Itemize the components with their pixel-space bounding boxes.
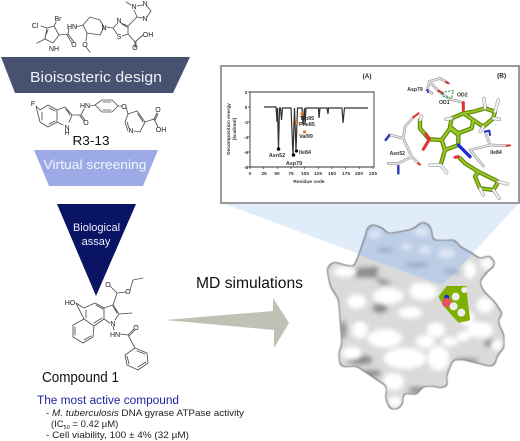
R3-13 structure: O bbox=[121, 104, 127, 111]
R3-13 structure: O bbox=[155, 107, 161, 114]
funnel step: virtual screening bbox=[34, 150, 158, 186]
starting inhibitor structure: OH bbox=[143, 32, 153, 39]
starting inhibitor structure: HN bbox=[67, 24, 77, 31]
activity summary text: The most active compound bbox=[37, 395, 179, 407]
starting inhibitor structure: Cl bbox=[32, 23, 39, 30]
blue upper lobe bbox=[359, 223, 472, 285]
binding pose B: ligand and residues bbox=[386, 73, 510, 198]
starting inhibitor structure: O bbox=[71, 42, 77, 49]
funnel step: biological assay: Biological bbox=[73, 222, 120, 234]
chart A: decomposition energy: 125 bbox=[314, 171, 322, 177]
chart A: decomposition energy: (A) bbox=[362, 73, 372, 80]
R3-13 structure: F bbox=[31, 101, 35, 108]
funnel step: bioisosteric design: Bioisosteric design bbox=[30, 70, 162, 86]
R3-13 structure: HN bbox=[80, 103, 90, 110]
binding pose B: ligand and residues: Asn52 bbox=[390, 151, 405, 157]
chart A: decomposition energy: Ile84 bbox=[299, 150, 311, 156]
starting inhibitor structure: O bbox=[82, 42, 88, 49]
starting inhibitor structure bbox=[32, 1, 153, 53]
starting inhibitor structure: S bbox=[117, 34, 122, 41]
starting inhibitor structure: Br bbox=[54, 16, 62, 23]
label: MD simulations: MD simulations bbox=[196, 275, 303, 292]
funnel step: virtual screening: Virtual screening bbox=[44, 157, 146, 172]
chart A: decomposition energy: 225 bbox=[369, 171, 377, 177]
bound ligand spheres bbox=[440, 287, 469, 321]
funnel step: biological assay bbox=[57, 204, 136, 296]
funnel step: biological assay: assay bbox=[82, 236, 111, 248]
chart A: decomposition energy: Residue code bbox=[293, 179, 325, 185]
starting inhibitor structure: O bbox=[132, 45, 138, 52]
arrow to protein bbox=[165, 298, 289, 348]
chart A: decomposition energy: Asp79 bbox=[286, 161, 302, 167]
label: compound 1: Compound 1 bbox=[42, 370, 119, 386]
label: R3-13: R3-13 bbox=[72, 134, 110, 148]
binding pose B: ligand and residues: Ile84 bbox=[490, 150, 502, 156]
starting inhibitor structure: N bbox=[116, 18, 122, 25]
starting inhibitor structure: N bbox=[101, 25, 107, 32]
R3-13 structure: O bbox=[83, 120, 89, 127]
chart A: decomposition energy: 50 bbox=[274, 171, 280, 177]
chart A: decomposition energy: 100 bbox=[301, 171, 309, 177]
chart A: decomposition energy: -2 bbox=[244, 120, 248, 126]
chart A: decomposition energy: 150 bbox=[328, 171, 336, 177]
projection wedge from protein to detail panel bbox=[222, 203, 519, 285]
chart A: decomposition energy: 0 bbox=[245, 105, 248, 111]
binding pose B: ligand and residues: OD2 bbox=[457, 93, 468, 99]
chart A: decomposition energy: 0 bbox=[249, 171, 252, 177]
chart A: decomposition energy: Val99 bbox=[299, 134, 313, 140]
R3-13 structure: H bbox=[64, 130, 70, 137]
chart A: decomposition energy: Asn52 bbox=[269, 153, 285, 159]
chart A: decomposition energy: -4 bbox=[244, 135, 248, 141]
protein surface with bound ligand bbox=[326, 222, 506, 410]
activity summary text: = 0.42 µM) bbox=[70, 419, 118, 430]
chart A: decomposition energy: 2 bbox=[245, 90, 248, 96]
chart A: decomposition energy: 75 bbox=[288, 171, 294, 177]
chart A: decomposition energy: -8 bbox=[244, 165, 248, 171]
R3-13 structure: N bbox=[64, 125, 70, 132]
detail panel bbox=[221, 66, 519, 203]
compound 1 structure: HO bbox=[65, 300, 76, 307]
activity summary text: - M. tuberculosis DNA gyrase ATPase activity bbox=[46, 408, 244, 419]
starting inhibitor structure: NH bbox=[49, 46, 59, 53]
chart A: decomposition energy: 200 bbox=[355, 171, 363, 177]
activity summary text: 50 bbox=[64, 425, 70, 431]
chart A: decomposition energy: Phe85 bbox=[299, 122, 315, 128]
compound 1 structure bbox=[65, 278, 148, 370]
chart A: decomposition energy bbox=[226, 73, 377, 185]
compound 1 structure: O bbox=[133, 325, 139, 332]
activity summary text: (IC bbox=[51, 419, 64, 430]
chart A: decomposition energy: Trp95 bbox=[300, 116, 314, 122]
compound 1 structure: O bbox=[105, 282, 111, 289]
compound 1 structure: N bbox=[110, 321, 116, 328]
chart A: decomposition energy: (kcal/mol) bbox=[232, 117, 238, 140]
activity summary text: - Cell viability, 100 ± 4% (32 µM) bbox=[46, 430, 189, 441]
binding pose B: ligand and residues: OD1 bbox=[439, 100, 450, 106]
chart A: decomposition energy: 175 bbox=[342, 171, 350, 177]
compound 1 structure: HN bbox=[110, 332, 120, 339]
compound 1 structure: O bbox=[125, 289, 131, 296]
binding pose B: ligand and residues: (B) bbox=[497, 73, 506, 80]
chart A: decomposition energy: Decomposition energy bbox=[226, 103, 232, 155]
chart A: decomposition energy: -6 bbox=[244, 150, 248, 156]
starting inhibitor structure: N bbox=[131, 4, 137, 11]
R3-13 structure: OH bbox=[156, 127, 166, 134]
activity summary text bbox=[37, 395, 244, 441]
binding pose B: ligand and residues: Asp79 bbox=[407, 87, 423, 93]
R3-13 structure: N bbox=[128, 128, 134, 135]
chart A: decomposition energy: 25 bbox=[261, 171, 267, 177]
R3-13 structure bbox=[31, 100, 166, 137]
funnel step: bioisosteric design bbox=[1, 57, 190, 93]
starting inhibitor structure: N bbox=[142, 1, 148, 8]
starting inhibitor structure: N bbox=[142, 16, 148, 23]
